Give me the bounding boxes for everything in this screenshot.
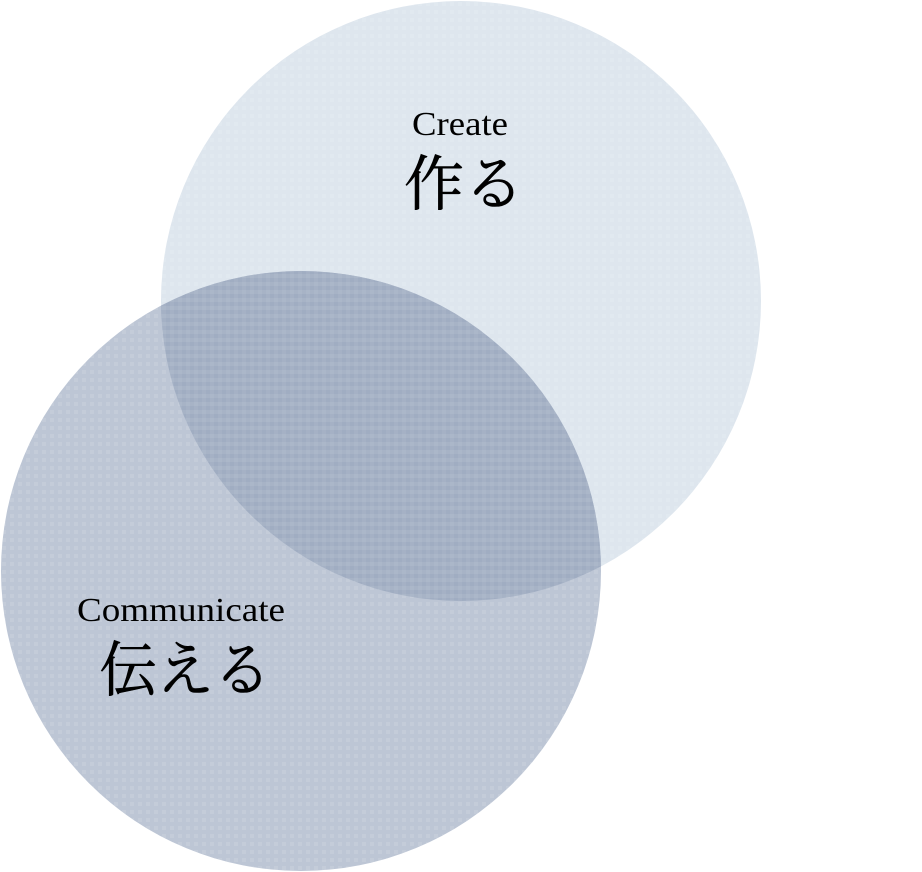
circle: Create <box>161 1 761 601</box>
label: Create: Create <box>412 106 508 143</box>
label: Communicate <box>77 592 285 704</box>
label: Create <box>404 106 524 218</box>
label: Communicate: 伝える <box>99 638 271 704</box>
circle: Communicate <box>1 271 601 871</box>
overlap region <box>161 271 601 601</box>
label: Communicate: Communicate <box>77 592 285 629</box>
label: Create: 作る <box>404 152 524 218</box>
